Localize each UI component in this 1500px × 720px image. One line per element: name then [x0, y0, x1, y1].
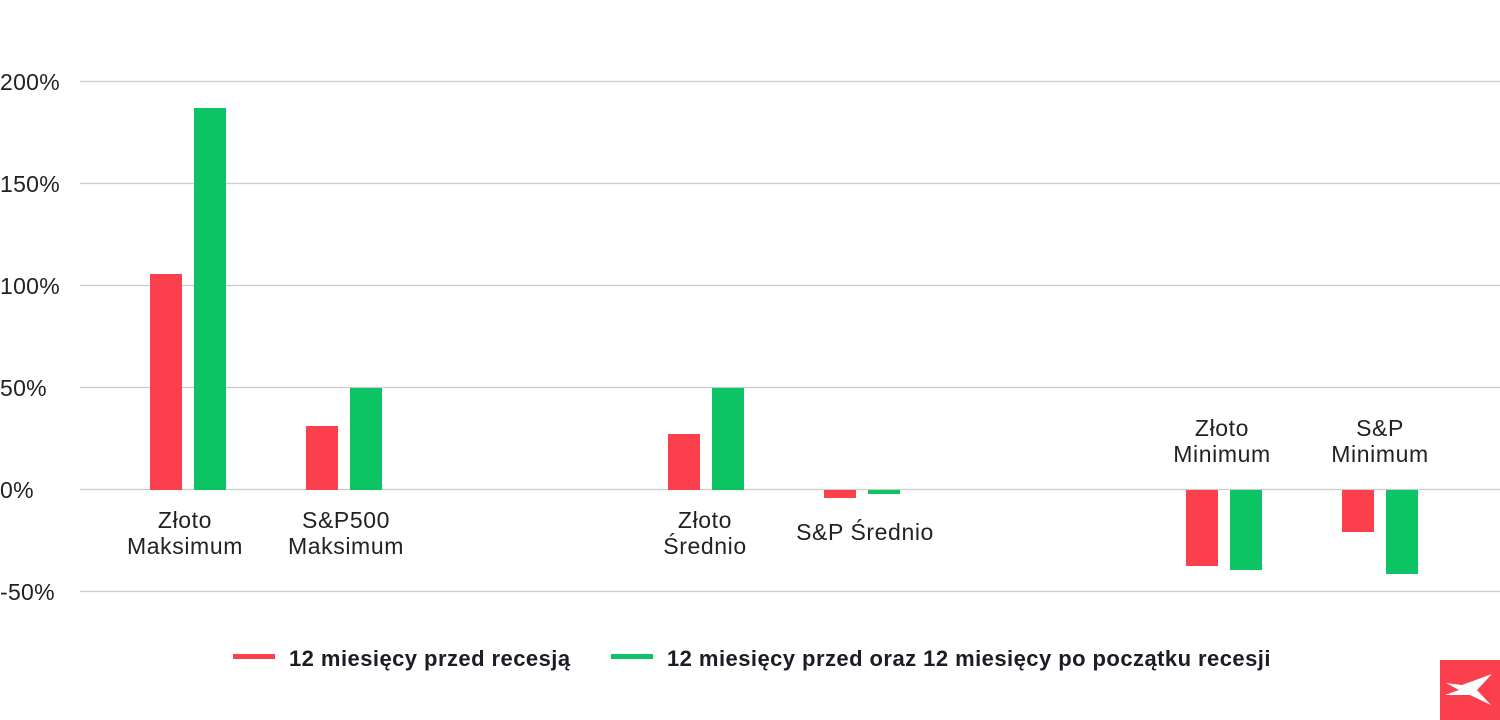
y-axis labels: 150%	[0, 171, 60, 197]
category labels: Średnio	[663, 532, 747, 559]
category labels: S&P Średnio	[796, 518, 934, 545]
y-axis labels: 50%	[0, 375, 47, 401]
bars	[150, 108, 1418, 574]
y-axis labels: 0%	[0, 477, 34, 503]
category labels: Minimum	[1331, 441, 1429, 467]
category labels: Złoto	[1195, 415, 1249, 441]
category labels: Złoto	[678, 507, 732, 533]
logo	[1440, 660, 1500, 720]
y-axis labels: -50%	[0, 579, 55, 605]
y-axis labels: 100%	[0, 273, 60, 299]
legend	[233, 646, 1271, 671]
category labels: S&P	[1356, 415, 1404, 441]
y-axis labels	[0, 69, 60, 605]
category labels: S&P500	[302, 507, 390, 533]
legend: 12 miesięcy przed oraz 12 miesięcy po początku recesji	[667, 646, 1271, 671]
category labels: Maksimum	[288, 533, 404, 559]
legend: 12 miesięcy przed recesją	[289, 646, 571, 671]
category labels: Maksimum	[127, 533, 243, 559]
category labels	[127, 415, 1429, 559]
category labels: Złoto	[158, 507, 212, 533]
y-axis labels: 200%	[0, 69, 60, 95]
category labels: Minimum	[1173, 441, 1271, 467]
